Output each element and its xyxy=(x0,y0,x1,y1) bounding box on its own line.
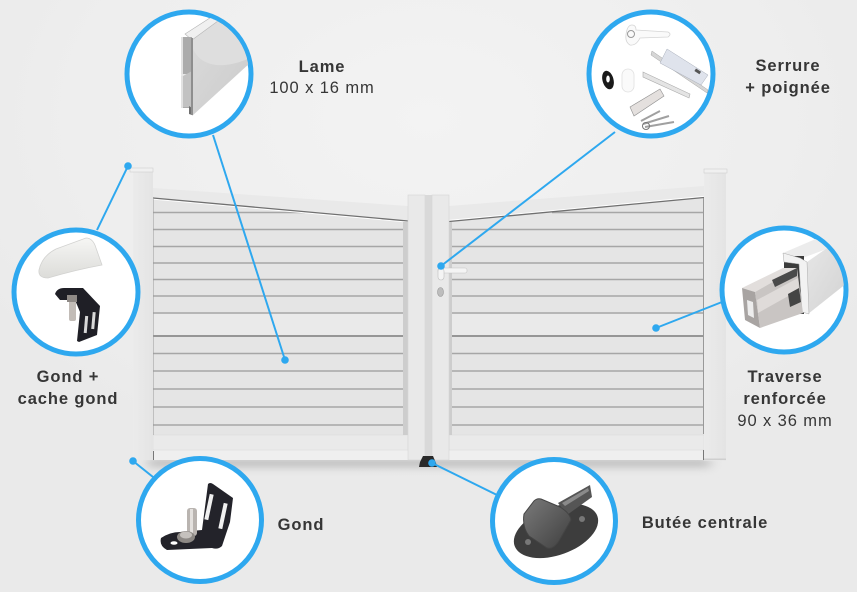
icon: slat profile xyxy=(181,18,248,116)
label: gond + cache gond: cache gond xyxy=(18,390,118,408)
label: lame: 100 x 16 mm xyxy=(269,79,375,97)
left leaf xyxy=(152,188,408,460)
ground shadow xyxy=(148,459,710,475)
callout: lame xyxy=(127,12,262,136)
label: serrure: Serrure xyxy=(755,57,821,75)
line: traverse xyxy=(652,302,722,332)
connector lines xyxy=(97,132,722,495)
line: butée xyxy=(428,459,497,495)
label: lame: Lame xyxy=(299,58,345,76)
callout: butée xyxy=(492,460,616,582)
central stop xyxy=(419,456,437,467)
callout: gond xyxy=(138,458,262,582)
icon: hinge cover xyxy=(39,238,102,278)
gate xyxy=(130,168,727,467)
line: gond et cache gond xyxy=(97,162,132,230)
label: traverse: 90 x 36 mm xyxy=(737,412,833,430)
handle and lock xyxy=(438,268,467,296)
icon: lock set xyxy=(600,25,708,130)
icon: central stop xyxy=(506,485,606,569)
icon: hinge bracket xyxy=(55,288,100,342)
callout: serrure xyxy=(589,12,713,136)
right leaf xyxy=(449,186,704,460)
label: traverse: Traverse xyxy=(747,368,823,386)
line: serrure xyxy=(437,132,615,270)
icon: reinforced rail xyxy=(742,238,847,328)
callout: gond + cache gond xyxy=(14,230,138,354)
label: traverse: renforcée xyxy=(743,390,827,408)
label: butée centrale: Butée centrale xyxy=(642,514,768,532)
label: gond + cache gond: Gond + xyxy=(37,368,99,386)
label: gond: Gond xyxy=(278,516,324,534)
icon: hinge xyxy=(161,483,233,550)
posts xyxy=(130,168,727,460)
label: serrure: + poignée xyxy=(745,79,831,97)
line: gond xyxy=(129,457,153,477)
callout: traverse xyxy=(722,228,847,352)
line: lame xyxy=(213,135,289,364)
bottom plinth xyxy=(153,450,704,460)
